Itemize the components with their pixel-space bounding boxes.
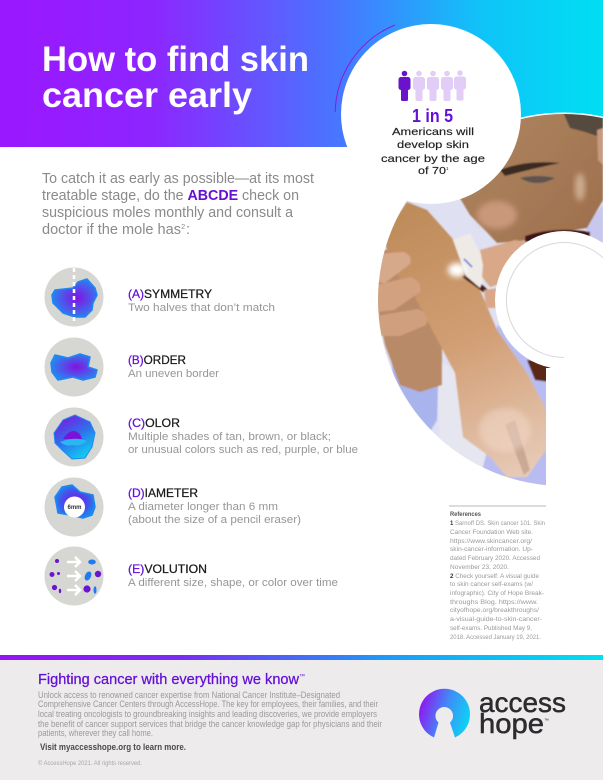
call to action: Visit myaccesshope.org to learn more. <box>40 742 186 753</box>
references: throughs Blog. https://www. <box>450 599 538 606</box>
icon: five people, one highlighted <box>398 70 466 101</box>
intro text: : <box>186 222 190 238</box>
label: color <box>128 416 358 456</box>
logo wordmark: hope <box>479 708 544 739</box>
circle with thin ring over photo <box>495 231 603 370</box>
footer body text: local treating oncologists to groundbreaking insights and leading discoveries, we provide employers <box>38 709 378 719</box>
icon: mole with 6mm marker <box>44 478 104 536</box>
intro text: treatable stage, do the ABCDE check on <box>42 188 299 204</box>
stat number: 1 in 5 <box>412 106 453 126</box>
footer body text <box>38 690 382 738</box>
references: November 23, 2020. <box>450 564 509 571</box>
footer heading: ™ <box>299 673 305 680</box>
references: infographic). City of Hope Break- <box>450 590 544 597</box>
icon: uneven border mole <box>44 338 104 396</box>
label: diameter: (about the size of a pencil eraser) <box>128 514 301 526</box>
label: border: An uneven border <box>128 368 219 380</box>
references: Cancer Foundation Web site. <box>450 529 533 536</box>
item: diameter <box>44 478 301 536</box>
stat caption: Americans will <box>392 126 474 138</box>
footer body text: Comprehensive Cancer Centers through AccessHope. The key for employees, their families, and their <box>38 699 378 709</box>
icon: changing moles with arrows <box>44 546 104 606</box>
footer body text: patients, wherever they call home. <box>38 728 153 738</box>
label: border: (B)ORDER <box>128 353 186 367</box>
intro text: 2 <box>181 222 185 231</box>
copyright: © AccessHope 2021. All rights reserved. <box>38 760 142 767</box>
logo wordmark <box>479 687 566 739</box>
references: to skin cancer self-exams (w/ <box>450 581 533 588</box>
references: 2018. Accessed January 19, 2021. <box>450 634 541 641</box>
references: References <box>450 511 481 518</box>
title: How to find skin <box>42 40 309 79</box>
intro text <box>42 171 314 238</box>
decorative stat arc <box>335 25 395 112</box>
panel: 1 in 5 statistic <box>341 24 521 204</box>
references: dated February 2020. Accessed <box>450 555 540 562</box>
references: self-exams. Published May 9, <box>450 625 532 632</box>
stat caption: 1 <box>446 166 449 171</box>
title <box>42 40 309 115</box>
stat caption: develop skin <box>397 139 469 151</box>
references: 1 Sarnoff DS. Skin cancer 101. Skin <box>450 520 545 527</box>
intro text: suspicious moles monthly and consult a <box>42 205 294 221</box>
logo mark keyhole <box>419 689 470 738</box>
icon: mole with 6mm marker: 6mm <box>67 505 82 511</box>
icon: asymmetric mole <box>44 268 104 326</box>
references: cityofhope.org/breakthroughs/ <box>450 607 539 614</box>
intro text: To catch it as early as possible—at its most <box>42 171 314 187</box>
logo wordmark: ™ <box>544 718 549 724</box>
footer body text: Unlock access to renowned cancer expertise from National Cancer Institute–Designated <box>38 690 340 700</box>
logo: access hope <box>419 687 566 739</box>
label: color: or unusual colors such as red, purple, or blue <box>128 444 358 456</box>
item: evolution <box>44 546 338 606</box>
footer heading: Fighting cancer with everything we know <box>38 672 300 688</box>
stat caption <box>381 126 485 177</box>
references: a-visual-guide-to-skin-cancer- <box>450 616 542 623</box>
label: border <box>128 353 219 380</box>
logo wordmark: access <box>479 687 566 718</box>
label: evolution: A different size, shape, or color over time <box>128 577 338 589</box>
item: border <box>44 338 219 396</box>
references <box>449 505 546 641</box>
item: color <box>44 408 358 466</box>
stat caption: cancer by the age <box>381 153 485 165</box>
references: https://www.skincancer.org/ <box>450 538 532 545</box>
panel: footer <box>0 655 603 780</box>
references: skin-cancer-information. Up- <box>450 546 533 553</box>
label: diameter: (D)IAMETER <box>128 486 198 500</box>
title: cancer early <box>42 76 253 115</box>
panel: header banner <box>0 0 603 147</box>
stat caption: of 70 <box>418 165 446 177</box>
icon: multicolored mole <box>44 408 104 466</box>
photo: man examining arm with dermatoscope <box>370 105 603 493</box>
label: color: (C)OLOR <box>128 416 180 430</box>
label: asymmetry: Two halves that don’t match <box>128 302 275 314</box>
footer body text: the benefit of cancer support services that bridge the cancer knowledge gap for physicians and their <box>38 719 382 729</box>
label: color: Multiple shades of tan, brown, or black; <box>128 431 331 443</box>
label: evolution <box>128 562 338 589</box>
intro text: doctor if the mole has <box>42 222 181 238</box>
label: evolution: (E)VOLUTION <box>128 562 207 576</box>
item: asymmetry <box>44 268 275 326</box>
references: 2 Check yourself: A visual guide <box>450 573 539 580</box>
label: asymmetry <box>128 287 275 314</box>
label: diameter: A diameter longer than 6 mm <box>128 501 278 513</box>
white cover beside lower photo <box>546 368 603 493</box>
label: diameter <box>128 486 301 526</box>
label: asymmetry: (A)SYMMETRY <box>128 287 212 301</box>
